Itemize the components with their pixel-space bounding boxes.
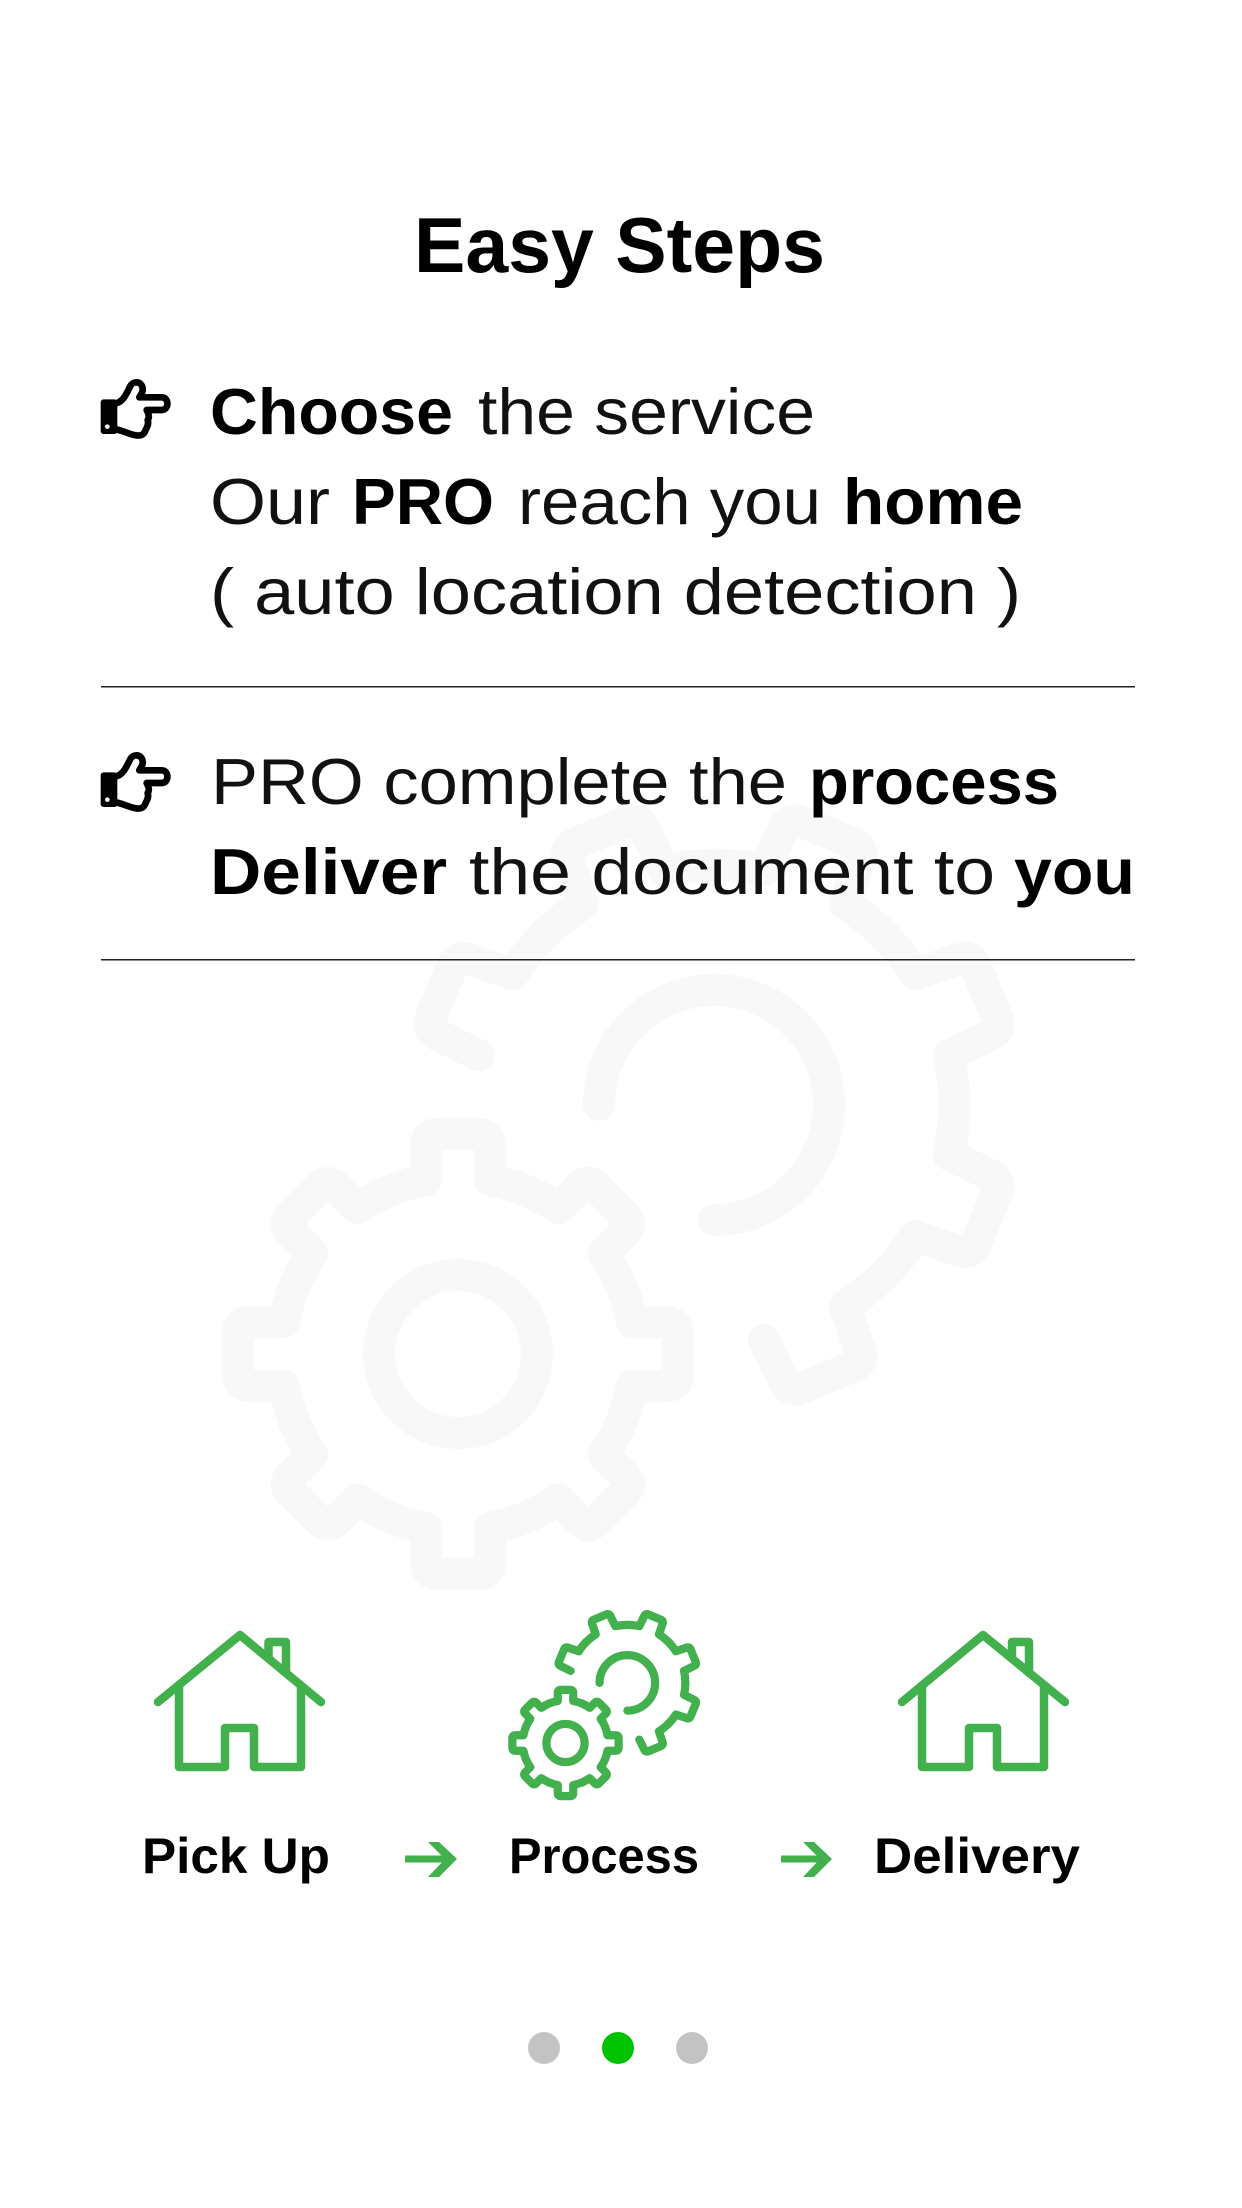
text: choose the service (210, 375, 1023, 628)
text: pro completes and delivers: Deliver (210, 835, 447, 908)
text: pro completes and delivers (210, 745, 1135, 908)
icon: pointing hand (101, 382, 167, 436)
panel: step two (101, 745, 1135, 908)
icon: pointing hand (101, 755, 167, 809)
text: choose the service: home (843, 465, 1023, 538)
text: choose the service: reach you (518, 465, 821, 538)
label: pick up: Pick Up (142, 1828, 330, 1884)
divider two (101, 959, 1135, 960)
title: Easy Steps (414, 201, 825, 289)
label: process: Process (509, 1828, 699, 1884)
text: pro completes and delivers: process (809, 745, 1059, 818)
icon: delivery house (902, 1635, 1065, 1767)
text: choose the service: Choose (210, 375, 453, 448)
icon: pick up house (158, 1635, 321, 1767)
text: pro completes and delivers: PRO complete the (211, 745, 787, 818)
text: choose the service: PRO (352, 465, 494, 538)
pagination dots (528, 2032, 708, 2064)
text: choose the service: the service (478, 375, 815, 448)
divider one (101, 686, 1135, 688)
label: delivery: Delivery (874, 1828, 1080, 1884)
panel: step one (101, 375, 1023, 628)
icon: process gears (512, 1609, 702, 1796)
arrow: pick up to process (405, 1842, 457, 1877)
text: choose the service: Our (210, 465, 330, 538)
text: pro completes and delivers: the document to (469, 835, 995, 908)
arrow: process to delivery (781, 1842, 832, 1877)
text: pro completes and delivers: you (1014, 835, 1135, 908)
background watermark: gears (238, 797, 1022, 1574)
text: choose the service: ( auto location detection ) (210, 555, 1021, 628)
